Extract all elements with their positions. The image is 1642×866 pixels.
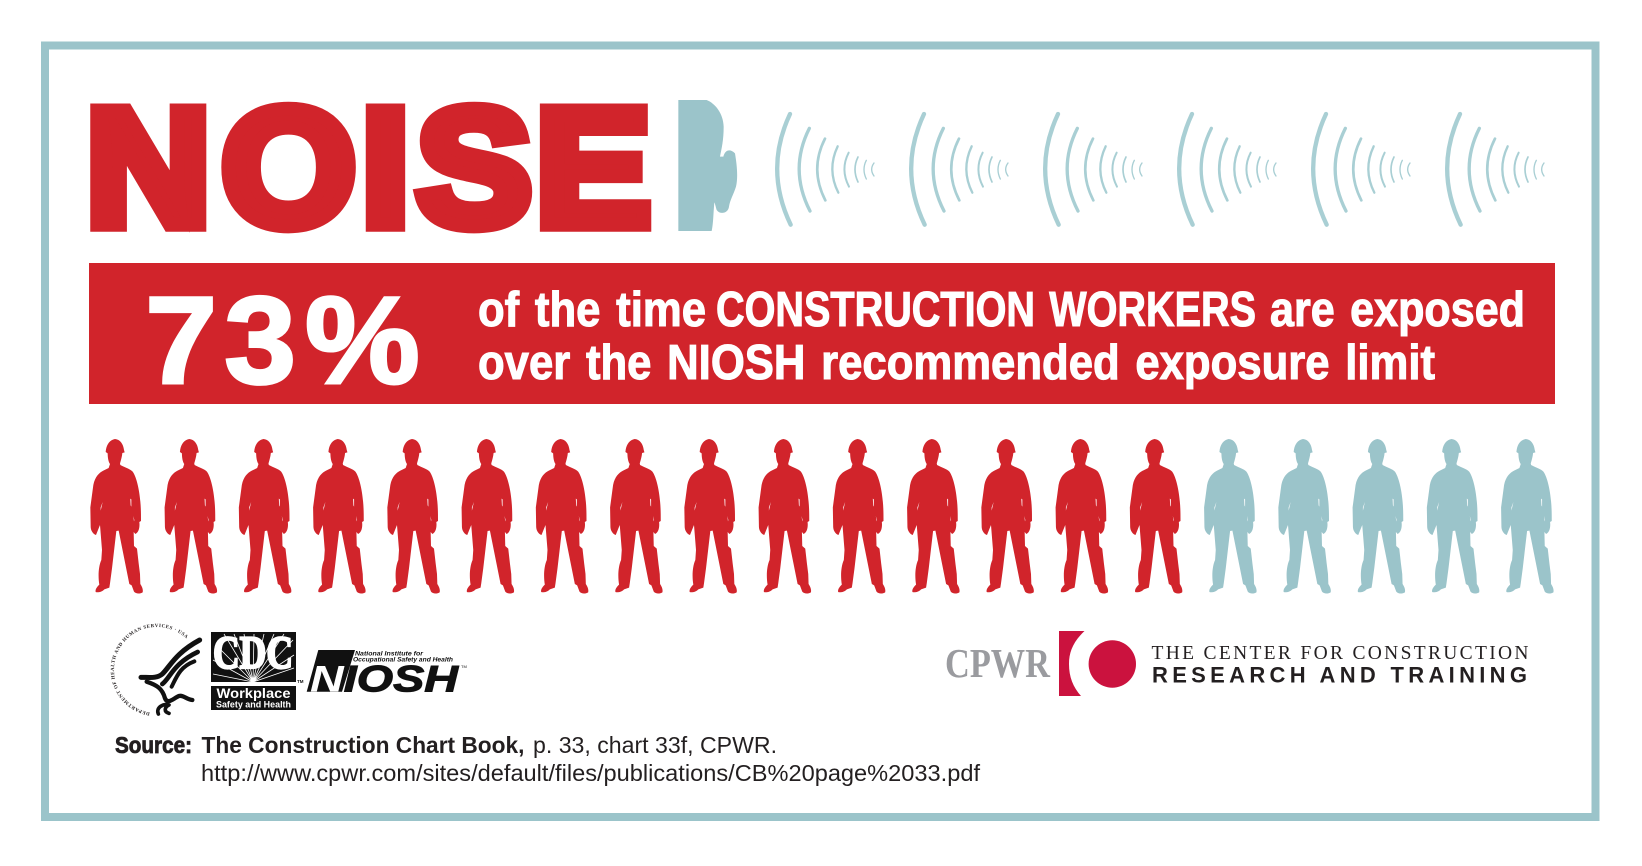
NIOSH trademark: TM bbox=[461, 664, 467, 669]
line 1 end: are exposed bbox=[1270, 283, 1525, 337]
worker 9 bbox=[684, 439, 737, 594]
worker 15 bbox=[1130, 439, 1182, 594]
worker 8 bbox=[610, 439, 663, 594]
worker 13 bbox=[981, 439, 1034, 594]
worker 1 bbox=[90, 439, 143, 594]
line 1 start: of the time bbox=[478, 283, 706, 337]
icon: ear bbox=[678, 100, 737, 231]
sound wave group 1 bbox=[777, 114, 874, 225]
red circle bbox=[1089, 640, 1136, 688]
worker 4 bbox=[313, 439, 366, 594]
sound wave group 3 bbox=[1045, 114, 1142, 225]
line 2: over the NIOSH recommended exposure limit bbox=[478, 336, 1435, 390]
sound wave group 6 bbox=[1447, 114, 1544, 225]
banner background bbox=[89, 263, 1555, 404]
worker 16 bbox=[1204, 439, 1257, 594]
Safety and Health label: Safety and Health bbox=[216, 699, 291, 709]
worker 20 bbox=[1501, 439, 1554, 594]
worker 2 bbox=[165, 439, 217, 594]
statement text bbox=[478, 283, 1525, 390]
institute name line 2: Occupational Safety and Health bbox=[353, 657, 453, 664]
CDC letters: CDC bbox=[213, 627, 293, 679]
worker 3 bbox=[239, 439, 291, 594]
worker 12 bbox=[907, 439, 960, 594]
CDC trademark: TM bbox=[297, 679, 304, 684]
logo: CPWR bbox=[945, 631, 1528, 696]
seal ring text: DEPARTMENT OF HEALTH AND HUMAN SERVICES · USA bbox=[110, 624, 188, 716]
row of worker silhouettes: 5 blue bbox=[1204, 439, 1554, 594]
sound waves bbox=[777, 114, 1544, 225]
worker 11 bbox=[833, 439, 885, 594]
worker 18 bbox=[1353, 439, 1405, 594]
Workplace block bbox=[211, 686, 296, 710]
worker 19 bbox=[1427, 439, 1479, 594]
line 1 emphasis: CONSTRUCTION WORKERS bbox=[716, 283, 1256, 337]
worker 10 bbox=[759, 439, 811, 594]
title: NOISE: NOISE bbox=[86, 75, 651, 260]
worker 14 bbox=[1056, 439, 1108, 594]
Workplace label: Workplace bbox=[216, 685, 291, 701]
source URL: http://www.cpwr.com/sites/default/files/publications/CB%20page%2033.pdf bbox=[201, 760, 981, 786]
logo: NIOSH bbox=[307, 650, 467, 700]
source label: Source: bbox=[115, 732, 192, 758]
sun rays bbox=[213, 634, 294, 682]
worker 7 bbox=[536, 439, 588, 594]
center name line 1: THE CENTER FOR CONSTRUCTION bbox=[1152, 643, 1528, 664]
sound wave group 5 bbox=[1313, 114, 1410, 225]
CPWR letters: CPWR bbox=[945, 640, 1050, 686]
row of worker silhouettes: 15 red bbox=[90, 439, 1182, 594]
source citation bbox=[115, 732, 981, 786]
worker 6 bbox=[462, 439, 514, 594]
page reference: p. 33, chart 33f, CPWR. bbox=[533, 732, 777, 758]
worker 17 bbox=[1278, 439, 1331, 594]
logo: HHS seal bbox=[110, 624, 202, 716]
book title: The Construction Chart Book, bbox=[202, 732, 524, 758]
N block bbox=[307, 650, 355, 692]
banner: 73% statistic bbox=[89, 263, 1555, 409]
CDC black block bbox=[211, 632, 296, 682]
NIOSH wordmark: NIOSH bbox=[310, 658, 460, 700]
worker 5 bbox=[387, 439, 440, 594]
sound wave group 2 bbox=[911, 114, 1008, 225]
institute name line 1: National Institute for bbox=[355, 651, 423, 658]
seal eagle bbox=[141, 640, 200, 714]
center name line 2: RESEARCH AND TRAINING bbox=[1152, 663, 1527, 688]
big number 73%: 73% bbox=[145, 270, 420, 409]
red bracket bbox=[1059, 631, 1084, 696]
sound wave group 4 bbox=[1179, 114, 1276, 225]
logo: CDC Workplace Safety and Health bbox=[211, 627, 304, 710]
